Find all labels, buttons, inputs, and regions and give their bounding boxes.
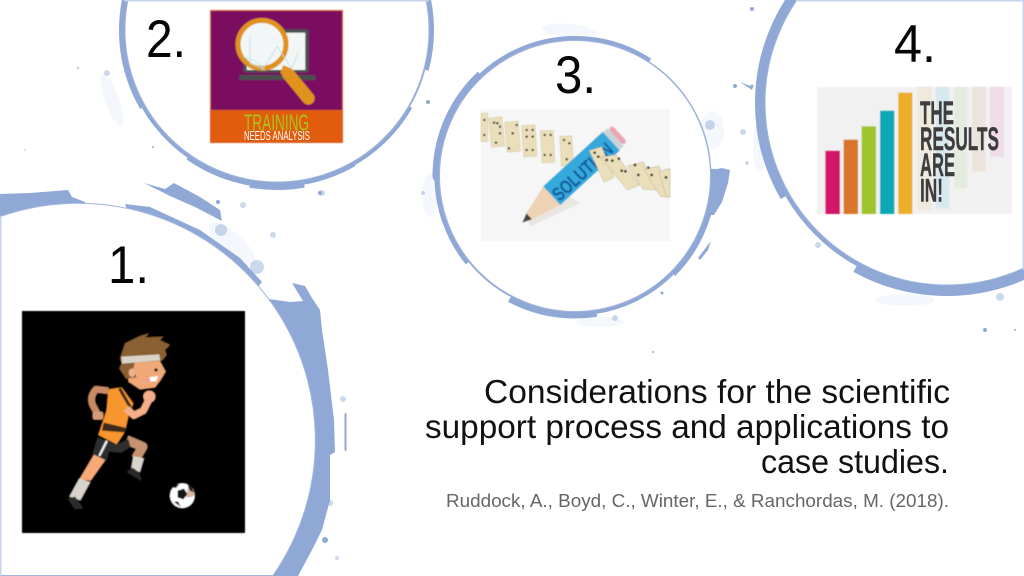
face xyxy=(128,360,166,389)
number 2: 2. xyxy=(146,10,186,69)
ring: circle 1 brush stroke xyxy=(0,190,335,576)
number 1: 1. xyxy=(108,236,149,295)
title: case studies. xyxy=(761,443,949,480)
ring: circle 2 brush stroke xyxy=(125,0,429,182)
number 4: 4. xyxy=(894,15,936,74)
ring: circle 4 brush stroke xyxy=(765,0,1024,285)
image: footballer running xyxy=(22,311,245,533)
shorts xyxy=(93,437,130,461)
image: pencil and dominoes xyxy=(481,109,670,241)
ring: circle 3 brush stroke xyxy=(440,40,730,312)
image: the results are in: IN! xyxy=(920,172,943,208)
panel: circle 1 xyxy=(0,190,335,576)
image: the results are in: ARE xyxy=(920,147,955,183)
number 3: 3. xyxy=(555,46,596,105)
back leg xyxy=(127,440,143,458)
image: pencil and dominoes: SOLUTION xyxy=(549,140,618,206)
title xyxy=(425,373,950,480)
title: support process and applications to xyxy=(425,408,949,445)
front leg xyxy=(79,454,105,481)
front arm xyxy=(126,399,149,415)
title: Considerations for the scientific xyxy=(484,373,950,410)
image: the results are in xyxy=(817,87,1012,214)
image: training needs analysis: TRAINING xyxy=(244,110,309,136)
panel: circle 2 xyxy=(125,0,429,182)
image: training needs analysis xyxy=(210,10,343,143)
panel: circle 3 xyxy=(440,40,730,312)
back arm xyxy=(92,389,108,415)
image: the results are in: THE xyxy=(920,95,954,131)
panel: circle 4 xyxy=(765,0,1024,285)
image: training needs analysis: NEEDS ANALYSIS xyxy=(244,129,310,143)
ball xyxy=(170,483,195,508)
torso xyxy=(98,387,133,444)
citation: Ruddock, A., Boyd, C., Winter, E., & Ranchordas, M. (2018). xyxy=(446,490,949,511)
